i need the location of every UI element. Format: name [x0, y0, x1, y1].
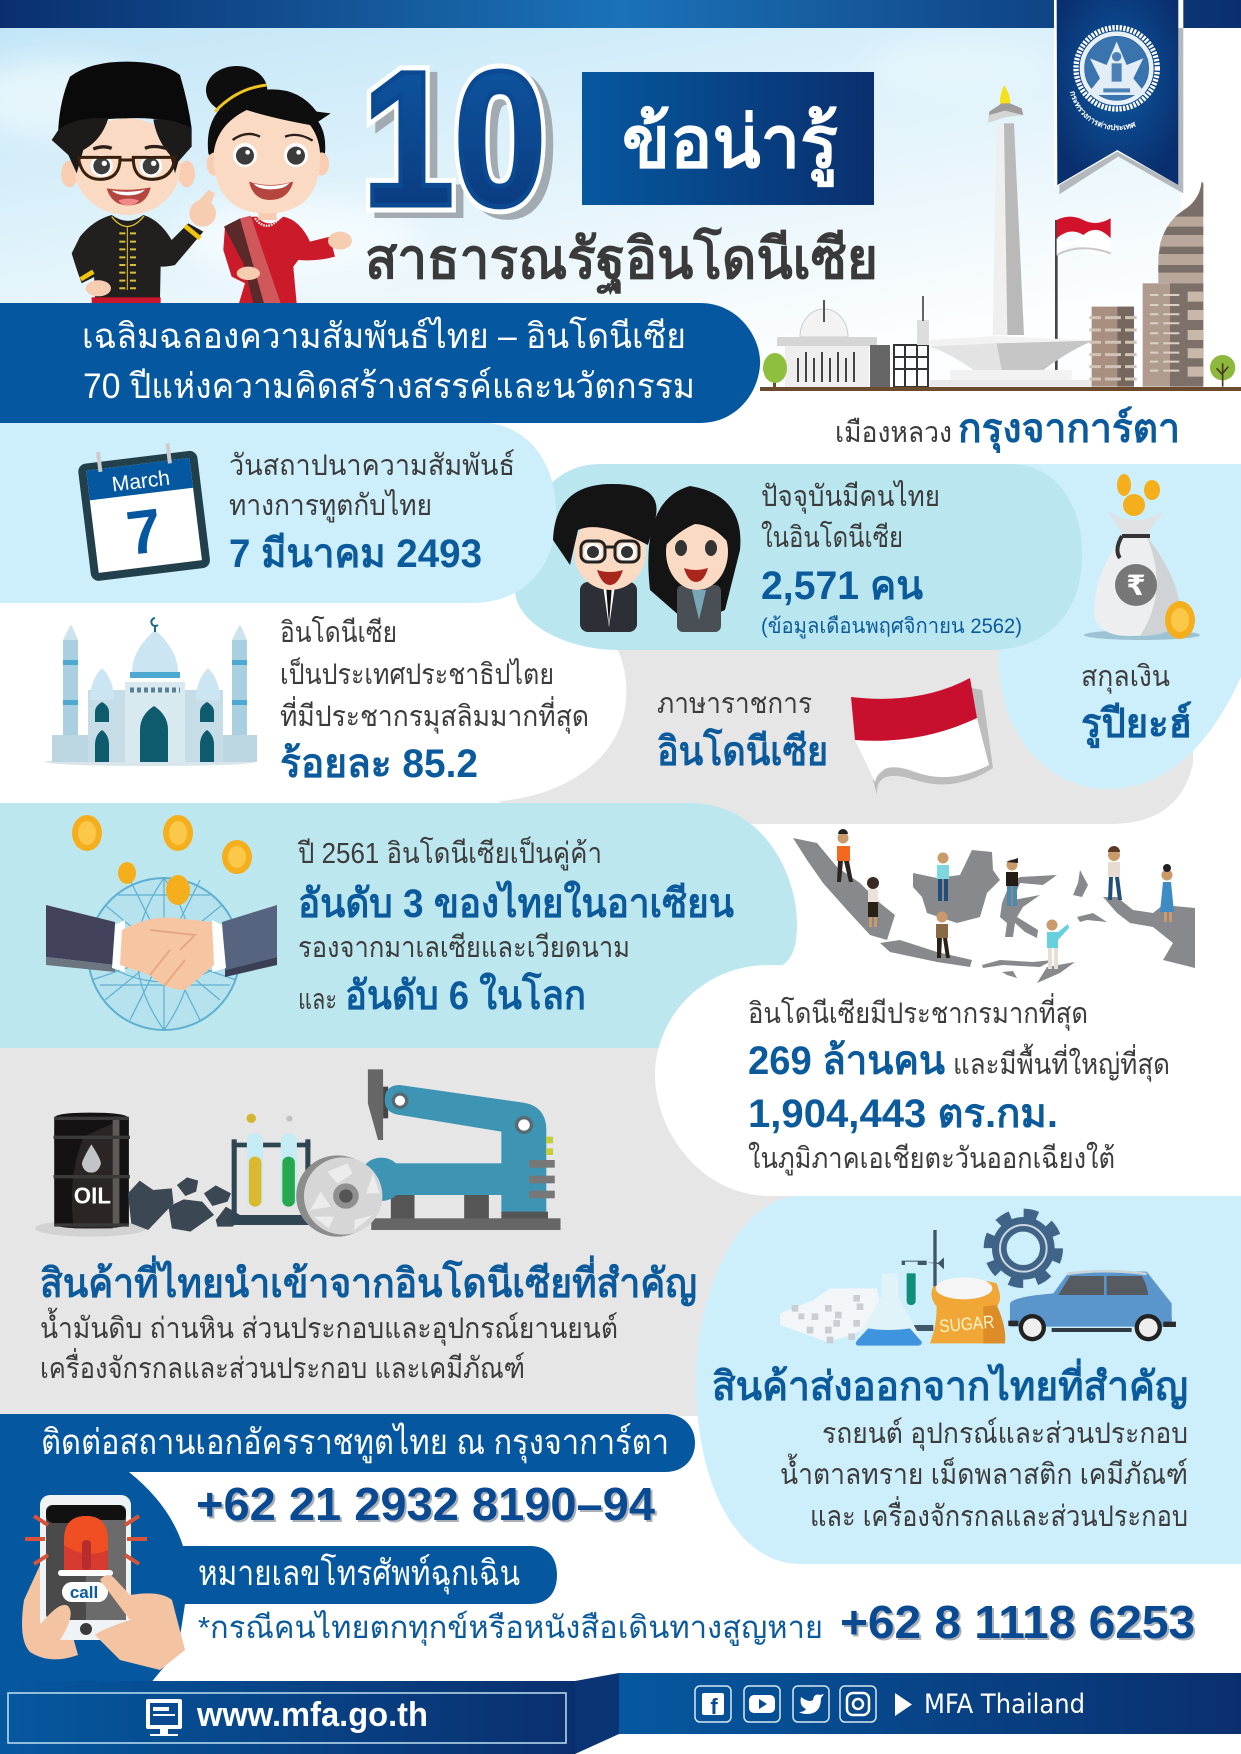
text: exports: น้ำตาลทราย เม็ดพลาสติก เคมีภัณฑ์ — [780, 1453, 1188, 1491]
person waving in cyan shirt — [1046, 920, 1069, 969]
text: diplomatic relations date: ทางการทูตกับไทย — [229, 488, 432, 523]
text: trade rank: อันดับ 3 ของไทยในอาเซียน — [298, 880, 734, 926]
text: trade rank: และ — [298, 984, 337, 1016]
footer: website bar — [0, 1673, 619, 1754]
text: official language — [657, 688, 828, 774]
text: imports: น้ำมันดิบ ถ่านหิน ส่วนประกอบและอุปกรณ์ยานยนต์ — [40, 1307, 618, 1346]
text: exports: และ เครื่องจักรกลและส่วนประกอบ — [810, 1496, 1188, 1533]
panel: population background — [655, 965, 1241, 1196]
icon: youtube — [744, 1686, 780, 1722]
text: trade rank — [298, 835, 734, 1018]
person in teal shirt — [937, 852, 949, 901]
person in brown shirt — [936, 912, 950, 958]
icon: rupiah money bag: ₹ — [1126, 569, 1146, 602]
text: Thai people in Indonesia: (ข้อมูลเดือนพฤศจิกายน 2562) — [761, 615, 1022, 639]
palace and trees — [763, 296, 929, 387]
header sky background — [0, 28, 1241, 398]
heading: contact embassy: ติดต่อสถานเอกอัครราชทูตไทย ณ กรุงจาการ์ตา — [41, 1422, 669, 1463]
title: 10 facts label: ข้อน่ารู้ — [622, 103, 838, 188]
text: exports: รถยนต์ อุปกรณ์และส่วนประกอบ — [822, 1417, 1188, 1451]
icon: calendar March 7: March — [111, 467, 171, 496]
capital city block: กรุงจาการ์ตา — [958, 406, 1180, 454]
illustration: Thai couple — [553, 484, 740, 632]
text: Thai people in Indonesia: 2,571 คน — [761, 564, 923, 608]
illustration: mosque — [45, 618, 257, 766]
capital city block — [835, 406, 1180, 454]
illustration: phone with siren and hand — [22, 1495, 185, 1670]
title number 10 outline: 10 — [362, 31, 546, 246]
icon: play arrow — [895, 1693, 912, 1716]
title box — [582, 72, 874, 205]
illustration: export goods: SUGAR — [939, 1312, 995, 1336]
ministry ribbon with emblem — [1054, 0, 1184, 194]
text: population and area: 1,904,443 ตร.กม. — [748, 1092, 1058, 1136]
text: Muslim population: ร้อยละ 85.2 — [280, 742, 478, 786]
capital city block: เมืองหลวง — [835, 417, 952, 449]
subtitle country name: สาธารณรัฐอินโดนีเซีย — [365, 226, 878, 295]
text: official language: อินโดนีเซีย — [657, 728, 828, 774]
text: diplomatic relations date: วันสถาปนาความสัมพันธ์ — [229, 449, 515, 482]
text: population and area: อินโดนีเซียมีประชากรมากที่สุด — [748, 993, 1088, 1031]
text: Muslim population: อินโดนีเซีย — [280, 615, 397, 649]
text: official language: ภาษาราชการ — [657, 688, 812, 720]
panel: 70 years banner: เฉลิมฉลองความสัมพันธ์ไทย – อินโดนีเซีย — [82, 316, 686, 356]
panel: Thai people background — [515, 464, 1082, 650]
text: Muslim population: ที่มีประชากรมุสลิมมากที่สุด — [280, 696, 589, 734]
text: Muslim population — [280, 615, 589, 786]
icon: instagram — [840, 1686, 876, 1722]
emergency phone number: +62 8 1118 6253 — [840, 1596, 1195, 1648]
text: population and area: 269 ล้านคน — [748, 1039, 945, 1083]
panel: imports background — [0, 1040, 800, 1416]
icon: calendar March 7 — [76, 440, 211, 582]
text: trade rank: ปี 2561 อินโดนีเซียเป็นคู่ค้า — [298, 835, 602, 871]
panel: official language background — [500, 640, 1193, 824]
text: diplomatic relations date — [229, 449, 515, 576]
text: currency — [1081, 661, 1192, 748]
illustration: handshake with globe and coins — [46, 815, 277, 1030]
text: imports: สินค้าที่ไทยนำเข้าจากอินโดนีเซียที่สำคัญ — [40, 1255, 697, 1307]
text: imports: เครื่องจักรกลและส่วนประกอบ และเคมีภัณฑ์ — [40, 1348, 525, 1385]
panel: currency background — [999, 464, 1241, 789]
text: imports — [40, 1255, 697, 1385]
footer: social media bar — [619, 1673, 1241, 1734]
text: emergency note: *กรณีคนไทยตกทุกข์หรือหนังสือเดินทางสูญหาย — [198, 1610, 823, 1647]
text: population and area: และมีพื้นที่ใหญ่ที่สุด — [953, 1043, 1170, 1082]
text: population and area — [748, 993, 1170, 1176]
text: currency: สกุลเงิน — [1081, 661, 1170, 694]
text: trade rank: อันดับ 6 ในโลก — [345, 972, 586, 1018]
person in blue dress — [1160, 864, 1174, 922]
illustration: map of Indonesia with people — [793, 829, 1195, 983]
text: exports — [712, 1358, 1188, 1533]
illustration: import goods: OIL — [74, 1182, 111, 1208]
illustration: Indonesian man character — [52, 62, 216, 303]
icon: Indonesian flag — [851, 678, 993, 795]
icon: rupiah money bag — [1084, 474, 1200, 640]
footer: website bar: www.mfa.go.th — [196, 1696, 428, 1734]
title number 10 face: 10 — [362, 31, 546, 246]
icon: twitter — [793, 1686, 829, 1722]
text: currency: รูปียะฮ์ — [1081, 701, 1192, 748]
text: population and area: ในภูมิภาคเอเชียตะวันออกเฉียงใต้ — [748, 1141, 1115, 1176]
illustration: Jakarta skyline — [760, 85, 1241, 391]
monument, flag and towers — [930, 85, 1235, 387]
illustration: import goods — [35, 1069, 561, 1237]
panel: trade rank background — [0, 803, 797, 1048]
text: exports: สินค้าส่งออกจากไทยที่สำคัญ — [712, 1358, 1188, 1410]
title number 10 shadow: 10 — [370, 37, 554, 252]
text: Thai people in Indonesia — [761, 479, 1022, 639]
person in white shirt — [1108, 846, 1122, 900]
panel: 70 years banner: 70 ปีแห่งความคิดสร้างสรรค์และนวัตกรรม — [83, 367, 695, 406]
text: Muslim population: เป็นประเทศประชาธิปไตย — [280, 656, 554, 691]
heading: emergency number: หมายเลขโทรศัพท์ฉุกเฉิน — [198, 1553, 520, 1594]
illustration: phone with siren and hand: call — [70, 1583, 98, 1602]
embassy phone number: +62 21 2932 8190–94 — [196, 1478, 655, 1530]
top header bar — [0, 0, 1241, 28]
illustration: export goods — [780, 1213, 1176, 1346]
panel: exports background — [696, 1196, 1241, 1564]
text: diplomatic relations date: 7 มีนาคม 2493 — [229, 532, 482, 576]
person in orange shirt — [837, 829, 853, 882]
text: trade rank: รองจากมาเลเซียและเวียดนาม — [298, 932, 630, 964]
icon: calendar March 7: 7 — [123, 496, 165, 569]
person in black shirt — [1006, 858, 1018, 906]
label: MFA Thailand: MFA Thailand — [924, 1689, 1085, 1720]
person in brown skirt — [867, 877, 879, 927]
panel: 70 years banner — [0, 303, 760, 423]
panel: contact section blue shape — [0, 1414, 695, 1690]
text: Thai people in Indonesia: ปัจจุบันมีคนไทย — [761, 479, 940, 514]
text: Thai people in Indonesia: ในอินโดนีเซีย — [761, 520, 903, 554]
icon: facebook: f — [710, 1694, 718, 1719]
panel: diplomatic relations background — [0, 423, 556, 603]
panel: mosque background — [0, 600, 626, 802]
icon: facebook — [695, 1686, 731, 1722]
illustration: Indonesian woman character — [206, 66, 352, 303]
ministry ribbon with emblem: กระทรวงการต่างประเทศ — [1070, 91, 1136, 130]
